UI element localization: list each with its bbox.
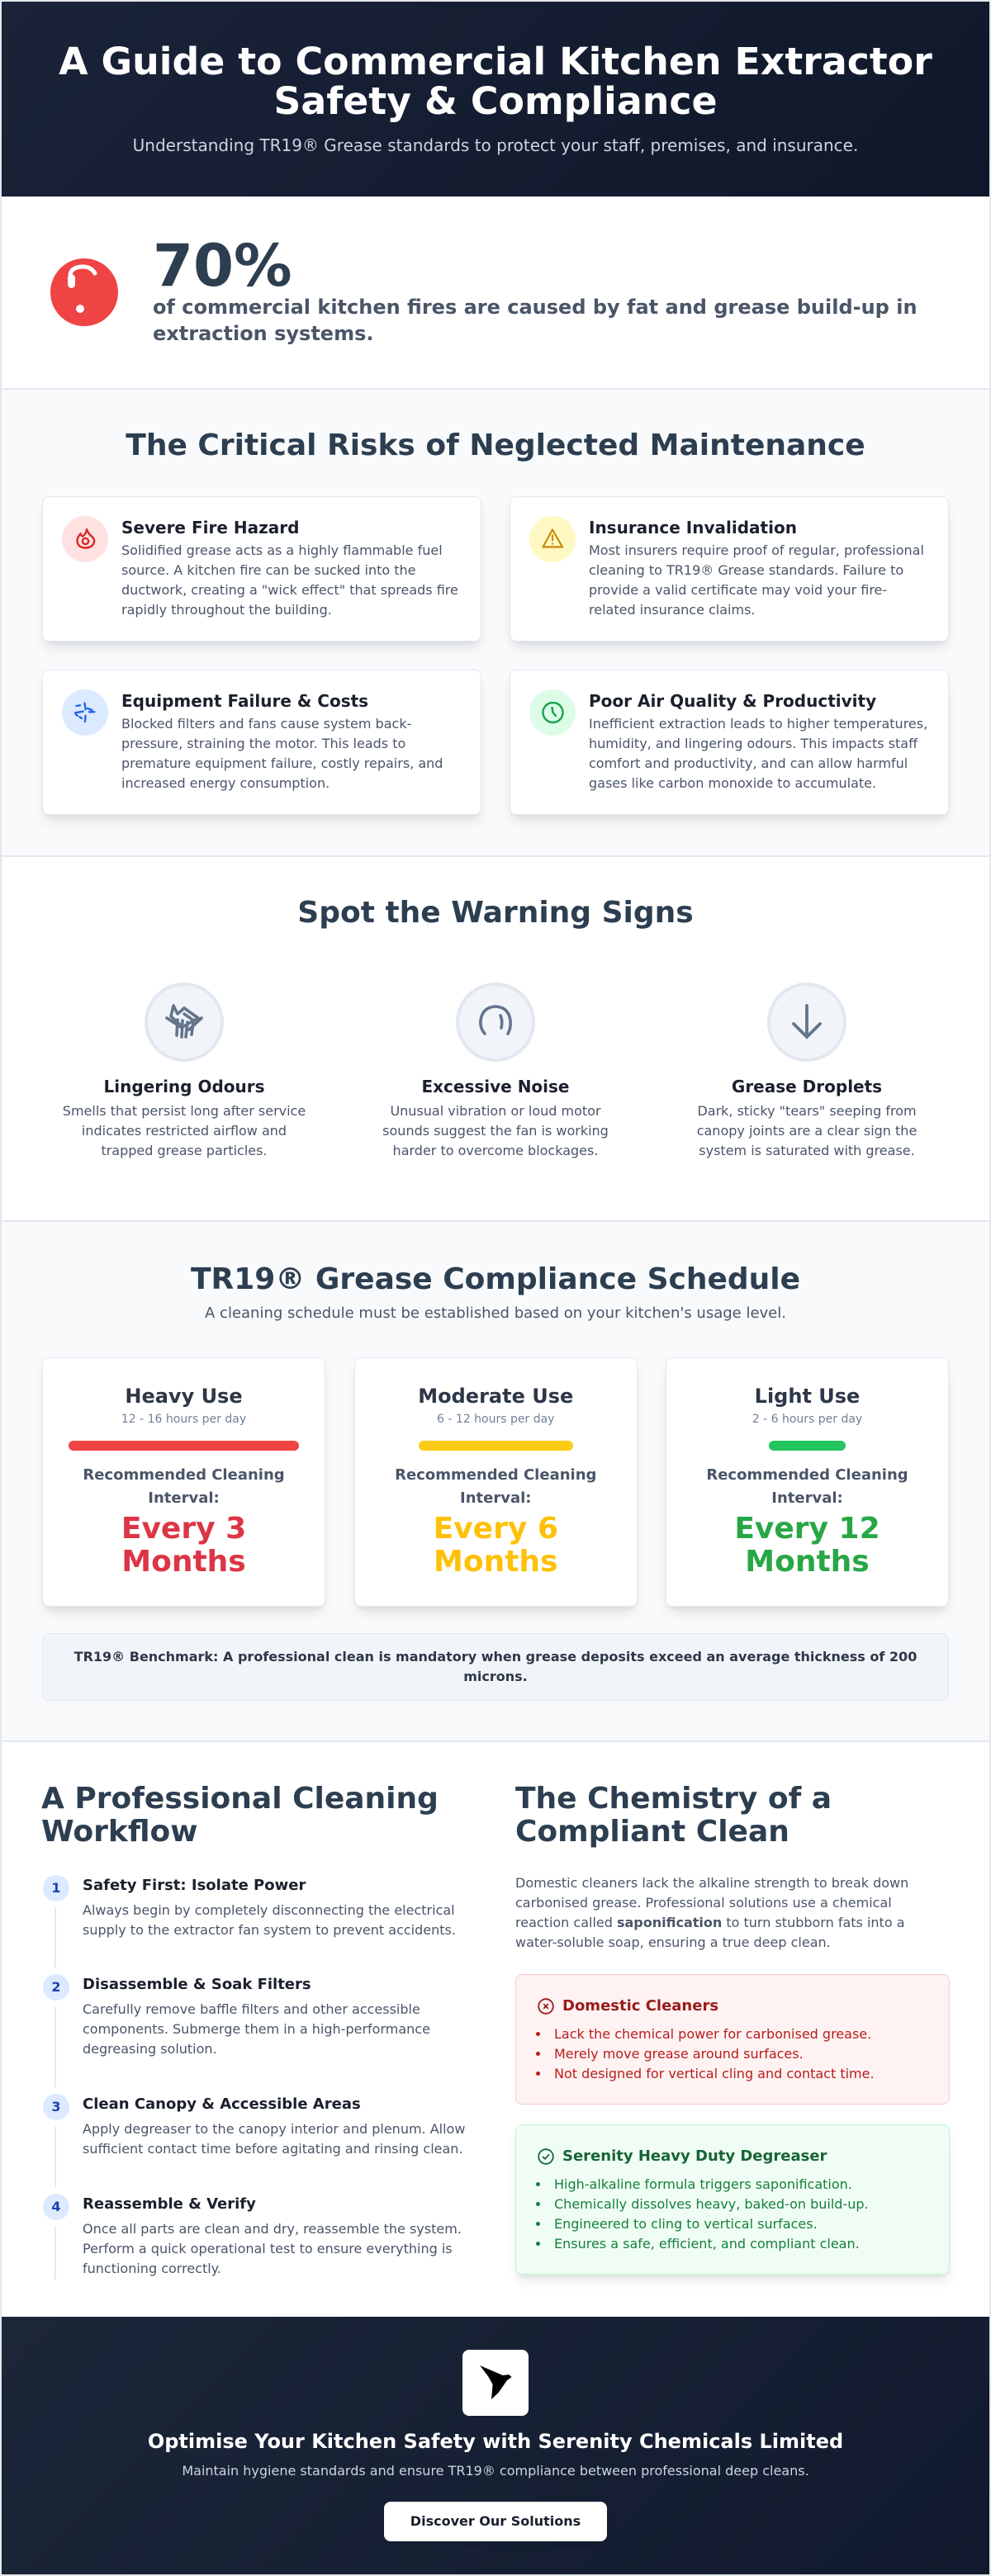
step 1 text: supply to the extractor fan system to prevent accidents. <box>83 1922 456 1938</box>
interval value <box>434 1512 558 1579</box>
step 4 text: Perform a quick operational test to ensure everything is <box>83 2241 453 2256</box>
usage hours: 12 - 16 hours per day <box>121 1413 246 1426</box>
step 3 text: Apply degreaser to the canopy interior and plenum. Allow <box>83 2121 465 2137</box>
heading: workflow: Workflow <box>41 1815 198 1849</box>
risk title: Insurance Invalidation <box>589 518 797 537</box>
heading: chemistry: Compliant Clean <box>515 1815 789 1849</box>
serenity list: Chemically dissolves heavy, baked-on build-up. <box>554 2196 869 2212</box>
interval value: Months <box>745 1545 870 1579</box>
serenity title: Serenity Heavy Duty Degreaser <box>562 2147 827 2165</box>
statistic number: 70% <box>153 232 292 300</box>
risk text: comfort and productivity, and can allow harmful <box>589 755 908 771</box>
logo tile <box>462 2350 529 2416</box>
interval label: Recommended Cleaning <box>395 1466 596 1484</box>
usage title: Light Use <box>755 1385 860 1408</box>
step 2 text: Carefully remove baffle filters and other accessible <box>83 2001 420 2017</box>
workflow steps <box>43 1875 465 2280</box>
icon: alert <box>50 258 118 326</box>
risk text <box>121 716 443 791</box>
title <box>59 39 932 123</box>
domestic cleaners list: Merely move grease around surfaces. <box>554 2046 804 2062</box>
heading: workflow <box>41 1782 439 1849</box>
interval label: Interval: <box>460 1489 531 1507</box>
interval label <box>395 1466 596 1507</box>
step 2 text <box>83 2001 430 2057</box>
icon: fan <box>62 689 108 736</box>
risk text: humidity, and lingering odours. This impacts staff <box>589 736 918 751</box>
header banner <box>2 2 989 197</box>
risk text: premature equipment failure, costly repairs, and <box>121 755 443 771</box>
domestic cleaners list: Lack the chemical power for carbonised grease. <box>554 2026 871 2042</box>
warning sign: odours text <box>63 1077 306 1158</box>
benchmark callout: microns. <box>463 1669 528 1684</box>
heading: chemistry <box>515 1782 832 1849</box>
step 4 number <box>43 2194 69 2220</box>
risk title: Poor Air Quality & Productivity <box>589 691 876 711</box>
warning sign: noise text: Unusual vibration or loud motor <box>390 1103 601 1119</box>
title: Safety & Compliance <box>273 78 718 123</box>
interval label: Recommended Cleaning <box>83 1466 285 1484</box>
risk card: fire hazard <box>42 496 481 642</box>
heading: warning signs: Spot the Warning Signs <box>297 896 694 930</box>
usage bar <box>69 1441 299 1451</box>
warning sign: droplets text: Grease Droplets <box>732 1077 882 1096</box>
chemistry paragraph <box>515 1875 908 1950</box>
risk title: Equipment Failure & Costs <box>121 691 368 711</box>
interval value <box>734 1512 880 1579</box>
schedule intro: A cleaning schedule must be established based on your kitchen's usage level. <box>205 1305 786 1322</box>
step 3 number: 3 <box>51 2099 61 2114</box>
risk text: cleaning to TR19® Grease standards. Failure to <box>589 562 903 578</box>
footer banner <box>2 2317 989 2574</box>
interval label: Interval: <box>771 1489 843 1507</box>
title: A Guide to Commercial Kitchen Extractor <box>59 39 932 83</box>
warning sign: odours text: Lingering Odours <box>103 1077 265 1096</box>
risk text: related insurance claims. <box>589 602 755 618</box>
warning sign: droplets text <box>697 1077 917 1158</box>
step 3 title: Clean Canopy & Accessible Areas <box>83 2095 361 2113</box>
step 4 text: functioning correctly. <box>83 2261 221 2276</box>
usage title: Moderate Use <box>418 1385 573 1408</box>
step 1 title: Safety First: Isolate Power <box>83 1877 306 1894</box>
chemistry paragraph: Domestic cleaners lack the alkaline strength to break down <box>515 1875 908 1891</box>
benchmark callout: TR19® Benchmark: A professional clean is mandatory when grease deposits exceed an average thickness of 200 <box>74 1649 917 1664</box>
icon: warning triangle <box>529 516 576 562</box>
risk text: rapidly throughout the building. <box>121 602 332 618</box>
usage hours: 2 - 6 hours per day <box>752 1413 862 1426</box>
risk card: equipment <box>42 670 481 815</box>
heading: chemistry: The Chemistry of a <box>515 1782 832 1816</box>
step 2 number <box>43 1974 69 2001</box>
call to action button <box>384 2502 607 2541</box>
step 3 text <box>83 2121 465 2157</box>
chemistry paragraph: reaction called saponification to turn stubborn fats into a <box>515 1915 905 1930</box>
icon: clock <box>529 689 576 736</box>
heading: schedule: TR19® Grease Compliance Schedule <box>191 1262 800 1296</box>
interval label <box>83 1466 285 1507</box>
interval label: Recommended Cleaning <box>706 1466 908 1484</box>
step 1 number <box>43 1875 69 1901</box>
statistic text: extraction systems. <box>153 322 373 345</box>
step 4 title: Reassemble & Verify <box>83 2195 256 2213</box>
panel: domestic cleaners <box>515 1974 950 2105</box>
warning icon: odours <box>145 983 224 1062</box>
interval value: Every 6 <box>434 1512 558 1546</box>
risk card: insurance <box>510 496 949 642</box>
domestic cleaners list: Not designed for vertical cling and contact time. <box>554 2066 875 2081</box>
panel: warning signs <box>2 857 989 1222</box>
usage hours: 6 - 12 hours per day <box>437 1413 554 1426</box>
usage bar <box>769 1441 846 1451</box>
interval label: Interval: <box>148 1489 220 1507</box>
statistic text <box>153 296 918 345</box>
risk text: Most insurers require proof of regular, professional <box>589 542 924 558</box>
warning sign: noise text: harder to overcome blockages. <box>393 1143 598 1158</box>
step 3 number <box>43 2094 69 2120</box>
benchmark callout <box>42 1633 949 1701</box>
interval label <box>706 1466 908 1507</box>
risk text <box>121 542 458 618</box>
risk text: provide a valid certificate may void your fire- <box>589 582 887 598</box>
warning sign: odours text: trapped grease particles. <box>101 1143 268 1158</box>
subtitle: Understanding TR19® Grease standards to protect your staff, premises, and insurance. <box>133 135 858 155</box>
risk text: Solidified grease acts as a highly flammable fuel <box>121 542 443 558</box>
icon: check circle <box>538 2148 554 2165</box>
warning sign: noise text <box>382 1077 609 1158</box>
heading: workflow: A Professional Cleaning <box>41 1782 439 1816</box>
interval value: Months <box>434 1545 557 1579</box>
warning icon: droplets <box>767 983 846 1062</box>
usage title: Heavy Use <box>125 1385 243 1408</box>
step 4 number: 4 <box>51 2199 61 2214</box>
step 3 text: sufficient contact time before agitating and rinsing clean. <box>83 2141 463 2157</box>
risk text: increased energy consumption. <box>121 775 330 791</box>
warning sign: droplets text: Dark, sticky "tears" seeping from <box>697 1103 917 1119</box>
interval value: Every 12 <box>734 1512 880 1546</box>
warning sign: noise text: Excessive Noise <box>421 1077 570 1096</box>
chemistry paragraph: water-soluble soap, ensuring a true deep clean. <box>515 1934 831 1950</box>
panel: serenity degreaser <box>515 2124 950 2275</box>
panel: workflow and chemistry <box>2 1742 989 2317</box>
risk text: gases like carbon monoxide to accumulate. <box>589 775 876 791</box>
risk title: Severe Fire Hazard <box>121 518 299 537</box>
warning icon: noise <box>456 983 535 1062</box>
icon: flame <box>62 516 108 562</box>
panel: compliance schedule <box>2 1222 989 1742</box>
statistic text: of commercial kitchen fires are caused by fat and grease build-up in <box>153 296 918 319</box>
schedule card: heavy <box>42 1357 325 1607</box>
risk text <box>589 716 927 791</box>
panel: key statistic <box>2 197 989 390</box>
warning sign: odours text: Smells that persist long after service <box>63 1103 306 1119</box>
icon: origami bird <box>480 2365 512 2399</box>
step 4 text <box>83 2221 462 2276</box>
step 2 text: degreasing solution. <box>83 2041 217 2057</box>
risk text <box>589 542 924 618</box>
risk text: Blocked filters and fans cause system back- <box>121 716 411 732</box>
step 1 text <box>83 1902 456 1938</box>
interval value: Every 3 <box>121 1512 246 1546</box>
domestic cleaners title: Domestic Cleaners <box>562 1997 718 2015</box>
step 1 number: 1 <box>51 1880 61 1896</box>
chemistry paragraph: carbonised grease. Professional solutions use a chemical <box>515 1895 892 1911</box>
call to action button: Discover Our Solutions <box>410 2513 581 2529</box>
warning sign: noise text: sounds suggest the fan is working <box>382 1123 609 1139</box>
warning sign: droplets text: system is saturated with grease. <box>699 1143 915 1158</box>
serenity list: Ensures a safe, efficient, and compliant clean. <box>554 2236 860 2252</box>
usage bar <box>419 1441 573 1451</box>
step 1 text: Always begin by completely disconnecting the electrical <box>83 1902 455 1918</box>
risk card: air quality <box>510 670 949 815</box>
panel: critical risks <box>2 390 989 857</box>
serenity list: Engineered to cling to vertical surfaces. <box>554 2216 818 2232</box>
step 2 title: Disassemble & Soak Filters <box>83 1976 311 1993</box>
step 4 text: Once all parts are clean and dry, reassemble the system. <box>83 2221 462 2237</box>
interval value <box>121 1512 246 1579</box>
warning sign: droplets text: canopy joints are a clear sign the <box>697 1123 917 1139</box>
heading: risks: The Critical Risks of Neglected Maintenance <box>126 429 865 462</box>
serenity list: High-alkaline formula triggers saponification. <box>554 2176 852 2192</box>
warning sign: odours text: indicates restricted airflow and <box>82 1123 287 1139</box>
risk text: Inefficient extraction leads to higher temperatures, <box>589 716 927 732</box>
footer subtitle: Maintain hygiene standards and ensure TR19® compliance between professional deep cleans. <box>182 2463 809 2479</box>
schedule card: light <box>666 1357 949 1607</box>
step 2 number: 2 <box>51 1979 61 1995</box>
interval value: Months <box>121 1545 246 1579</box>
risk text: pressure, straining the motor. This leads to <box>121 736 405 751</box>
schedule card: moderate <box>353 1357 638 1607</box>
risk text: ductwork, creating a "wick effect" that spreads fire <box>121 582 458 598</box>
icon: cross circle <box>538 1998 554 2015</box>
step 2 text: components. Submerge them in a high-performance <box>83 2021 430 2037</box>
footer title: Optimise Your Kitchen Safety with Serenity Chemicals Limited <box>148 2430 843 2453</box>
risk text: source. A kitchen fire can be sucked into the <box>121 562 416 578</box>
